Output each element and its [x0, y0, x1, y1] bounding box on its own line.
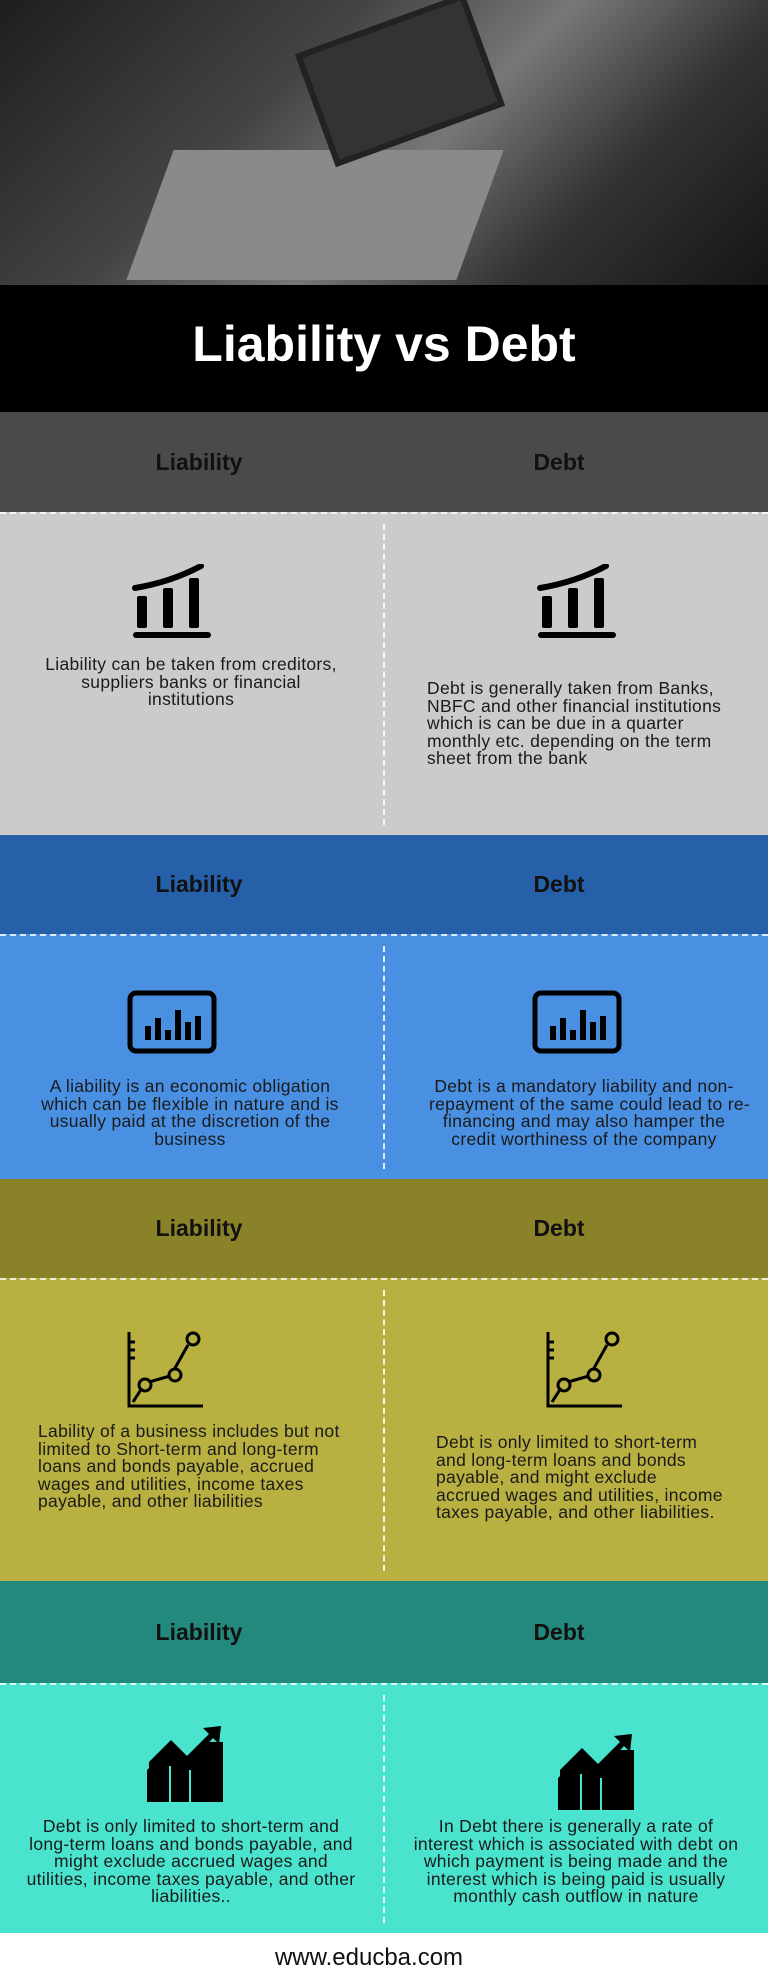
section 2 header	[0, 835, 768, 934]
header photo	[0, 0, 768, 285]
icon: growth chart right	[558, 1734, 634, 1810]
text: debt scope: taxes payable, and other liabilities.	[436, 1502, 715, 1522]
text: debt interest	[414, 1816, 738, 1906]
section 3 header: Liability	[156, 1215, 242, 1241]
text: debt scope: and long-term loans and bonds	[436, 1450, 686, 1470]
text: debt interest: In Debt there is generally a rate of	[439, 1816, 713, 1836]
icon: monitor chart right	[532, 990, 622, 1054]
footer url: www.educba.com	[275, 1944, 463, 1971]
text: liability scope	[38, 1421, 340, 1511]
text: liability source: suppliers banks or financial	[81, 672, 301, 692]
text: debt mandatory	[429, 1076, 750, 1148]
text: debt source: sheet from the bank	[427, 748, 587, 768]
text: debt mandatory: credit worthiness of the company	[451, 1128, 717, 1148]
text: debt mandatory: Debt is a mandatory liability and non-	[434, 1076, 734, 1096]
icon: monitor chart left	[128, 990, 216, 1054]
text: debt interest: interest which is associated with debt on	[414, 1834, 738, 1854]
text: liability scope: payable, and other liabilities	[38, 1491, 263, 1511]
icon: line chart left	[128, 1332, 203, 1408]
text: debt source: which is can be due in a quarter	[427, 713, 684, 733]
text: liability limits: utilities, income taxes payable, and other	[27, 1868, 355, 1888]
paper sheet	[126, 150, 504, 280]
text: debt interest: monthly cash outflow in nature	[453, 1886, 699, 1906]
text: liability source: institutions	[148, 689, 234, 709]
text: liability obligation: which can be flexible in nature and is	[41, 1094, 339, 1114]
text: liability scope: wages and utilities, income taxes	[38, 1474, 304, 1494]
text: liability scope: Lability of a business includes but not	[38, 1421, 340, 1441]
text: liability limits: liabilities..	[151, 1886, 231, 1906]
text: debt scope: payable, and might exclude	[436, 1467, 657, 1487]
section 3 header: Debt	[533, 1215, 585, 1241]
section 2 header: Liability	[156, 871, 242, 897]
text: debt interest: which payment is being made and the	[424, 1851, 728, 1871]
text: liability limits: might exclude accrued wages and	[54, 1851, 328, 1871]
text: liability obligation: usually paid at the discretion of the	[50, 1111, 330, 1131]
text: debt source: Debt is generally taken from Banks,	[427, 678, 714, 698]
laptop	[295, 0, 505, 167]
section 4 header: Debt	[533, 1618, 585, 1644]
section 1 header: Liability	[156, 448, 242, 474]
icon: bar chart left	[132, 564, 211, 638]
text: liability obligation: A liability is an economic obligation	[50, 1076, 330, 1096]
section 4 header: Liability	[156, 1618, 242, 1644]
section 1 header: Debt	[533, 448, 585, 474]
text: debt source: NBFC and other financial institutions	[427, 696, 721, 716]
text: debt source	[427, 678, 721, 768]
section 2 body	[0, 934, 768, 1179]
icon: growth chart left	[147, 1726, 223, 1802]
section 4 body	[0, 1683, 768, 1933]
section 1 body	[0, 512, 768, 835]
title: Liability vs Debt	[192, 316, 576, 372]
icon: bar chart right	[537, 564, 616, 638]
text: liability scope: limited to Short-term and long-term	[38, 1438, 319, 1458]
text: debt mandatory: repayment of the same could lead to re-	[429, 1094, 750, 1114]
text: debt scope: accrued wages and utilities, income	[436, 1484, 723, 1504]
section 2 header: Debt	[533, 871, 585, 897]
text: debt scope	[436, 1432, 723, 1522]
section 3 header	[0, 1179, 768, 1278]
section 4 header	[0, 1581, 768, 1683]
section 1 header	[0, 412, 768, 512]
text: debt interest: interest which is being paid is usually	[427, 1868, 725, 1888]
title	[0, 285, 768, 412]
icon: line chart right	[546, 1332, 622, 1408]
text: debt mandatory: financing and may also hamper the	[443, 1111, 725, 1131]
text: liability limits: Debt is only limited to short-term and	[43, 1816, 339, 1836]
text: liability obligation	[41, 1076, 339, 1148]
text: debt scope: Debt is only limited to short-term	[436, 1432, 697, 1452]
text: debt source: monthly etc. depending on the term	[427, 730, 712, 750]
text: liability limits	[27, 1816, 355, 1906]
text: liability scope: loans and bonds payable, accrued	[38, 1456, 314, 1476]
section 3 body	[0, 1278, 768, 1581]
text: liability source: Liability can be taken from creditors,	[45, 654, 337, 674]
text: liability limits: long-term loans and bonds payable, and	[29, 1834, 353, 1854]
text: liability source	[45, 654, 337, 709]
text: liability obligation: business	[154, 1128, 226, 1148]
